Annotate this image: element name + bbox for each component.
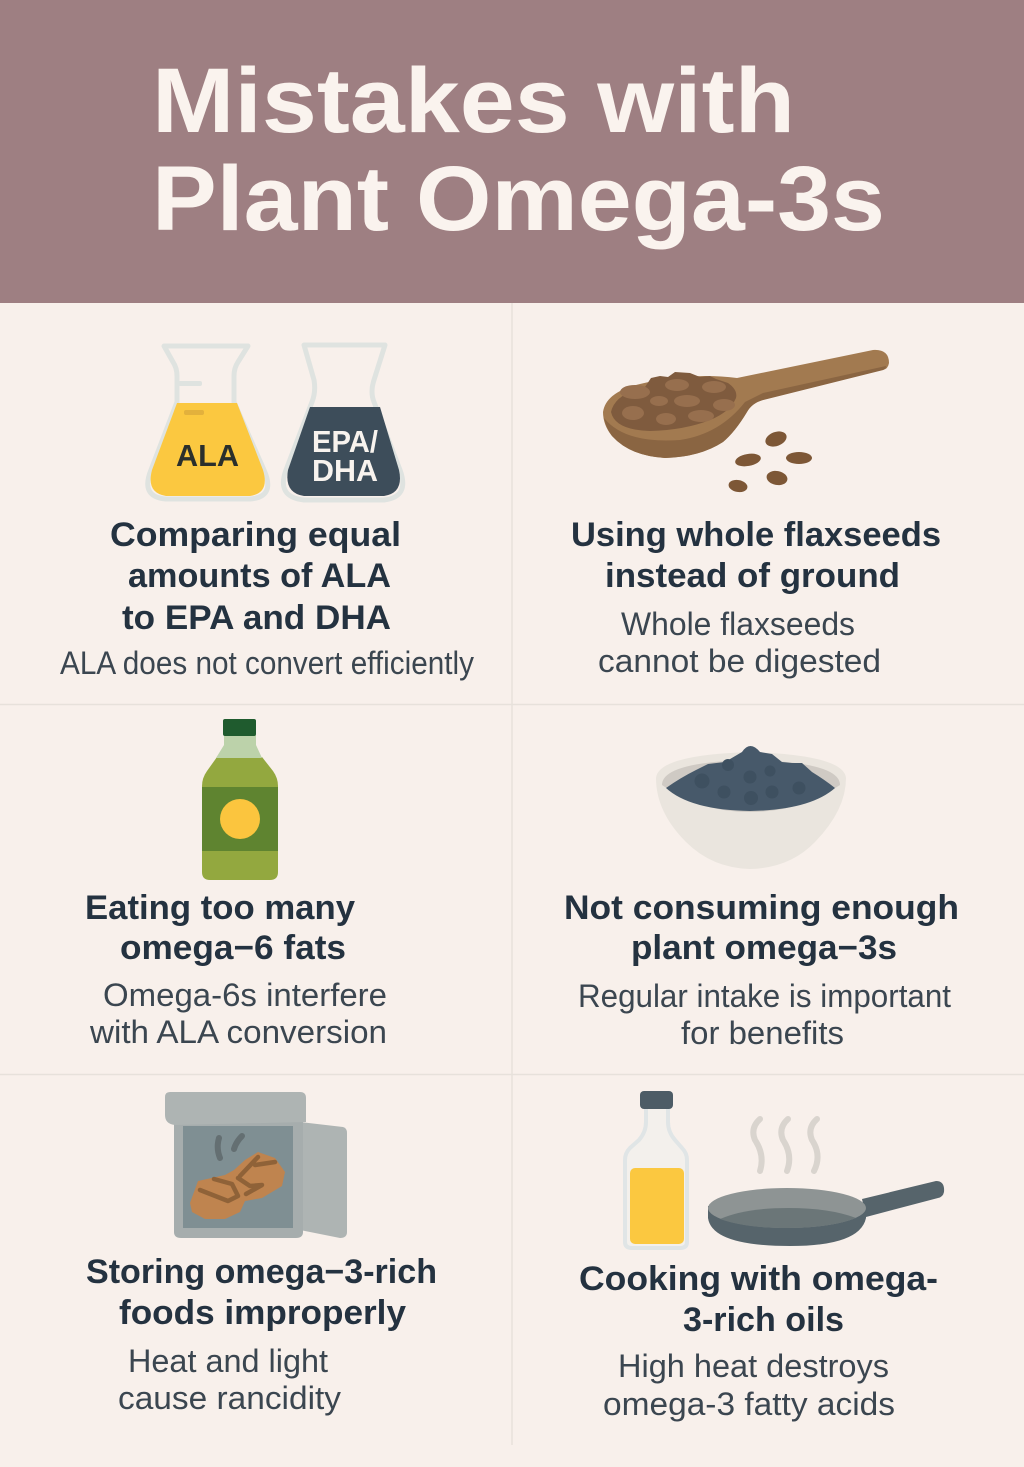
- icon: open box with rancid nuts: [165, 1092, 347, 1238]
- heading: Comparing equal: [110, 516, 401, 554]
- heading: [85, 889, 355, 967]
- body text: Whole flaxseeds: [621, 606, 855, 642]
- heading: Cooking with omega-: [579, 1260, 938, 1298]
- heading: plant omega−3s: [631, 929, 897, 967]
- icon: oil bottle and steaming pan: [625, 1091, 944, 1248]
- heading: 3-rich oils: [683, 1301, 844, 1339]
- heading: [564, 889, 959, 967]
- icon: ALA and EPA/DHA flasks: EPA/: [312, 424, 378, 459]
- body text: for benefits: [681, 1015, 844, 1051]
- title: [152, 50, 885, 250]
- heading: instead of ground: [605, 557, 900, 595]
- panel: comparing ALA to EPA and DHA: [60, 345, 474, 681]
- icon: ALA and EPA/DHA flasks: [148, 345, 403, 500]
- panel: cooking with oils: [579, 1091, 944, 1422]
- heading: Eating too many: [85, 889, 355, 927]
- heading: [110, 516, 401, 637]
- body text: ALA does not convert efficiently: [60, 645, 474, 681]
- body text: [603, 1348, 895, 1422]
- icon: ALA and EPA/DHA flasks: ALA: [176, 438, 239, 473]
- body text: High heat destroys: [618, 1348, 889, 1384]
- body text: [118, 1343, 341, 1416]
- heading: Storing omega−3-rich: [86, 1253, 437, 1291]
- panel: not enough plant omega-3s: [564, 746, 959, 1051]
- heading: [579, 1260, 938, 1339]
- heading: amounts of ALA: [128, 557, 391, 595]
- title: Mistakes with: [152, 50, 795, 152]
- panel: too many omega-6 fats: [85, 719, 387, 1050]
- panel: whole flaxseeds: [571, 350, 941, 679]
- header band: [0, 0, 1024, 303]
- icon: bowl of seeds: [656, 746, 846, 869]
- icon: ALA and EPA/DHA flasks: DHA: [312, 453, 378, 488]
- heading: Using whole flaxseeds: [571, 516, 941, 554]
- body text: omega-3 fatty acids: [603, 1386, 895, 1422]
- body text: [89, 977, 387, 1050]
- body text: Heat and light: [128, 1343, 328, 1379]
- body text: [578, 978, 951, 1051]
- body text: cannot be digested: [598, 643, 881, 679]
- icon: green oil bottle: [202, 719, 278, 880]
- body text: Omega-6s interfere: [103, 977, 387, 1013]
- panel: improper storage: [86, 1092, 437, 1416]
- icon: wooden spoon with seeds: [603, 350, 889, 494]
- heading: [571, 516, 941, 595]
- body text: [598, 606, 881, 679]
- body text: with ALA conversion: [89, 1014, 387, 1050]
- heading: [86, 1253, 437, 1332]
- title: Plant Omega-3s: [152, 148, 885, 250]
- heading: Not consuming enough: [564, 889, 959, 927]
- heading: omega−6 fats: [120, 929, 346, 967]
- heading: foods improperly: [119, 1294, 406, 1332]
- body text: cause rancidity: [118, 1380, 341, 1416]
- body text: Regular intake is important: [578, 978, 951, 1014]
- heading: to EPA and DHA: [122, 599, 391, 637]
